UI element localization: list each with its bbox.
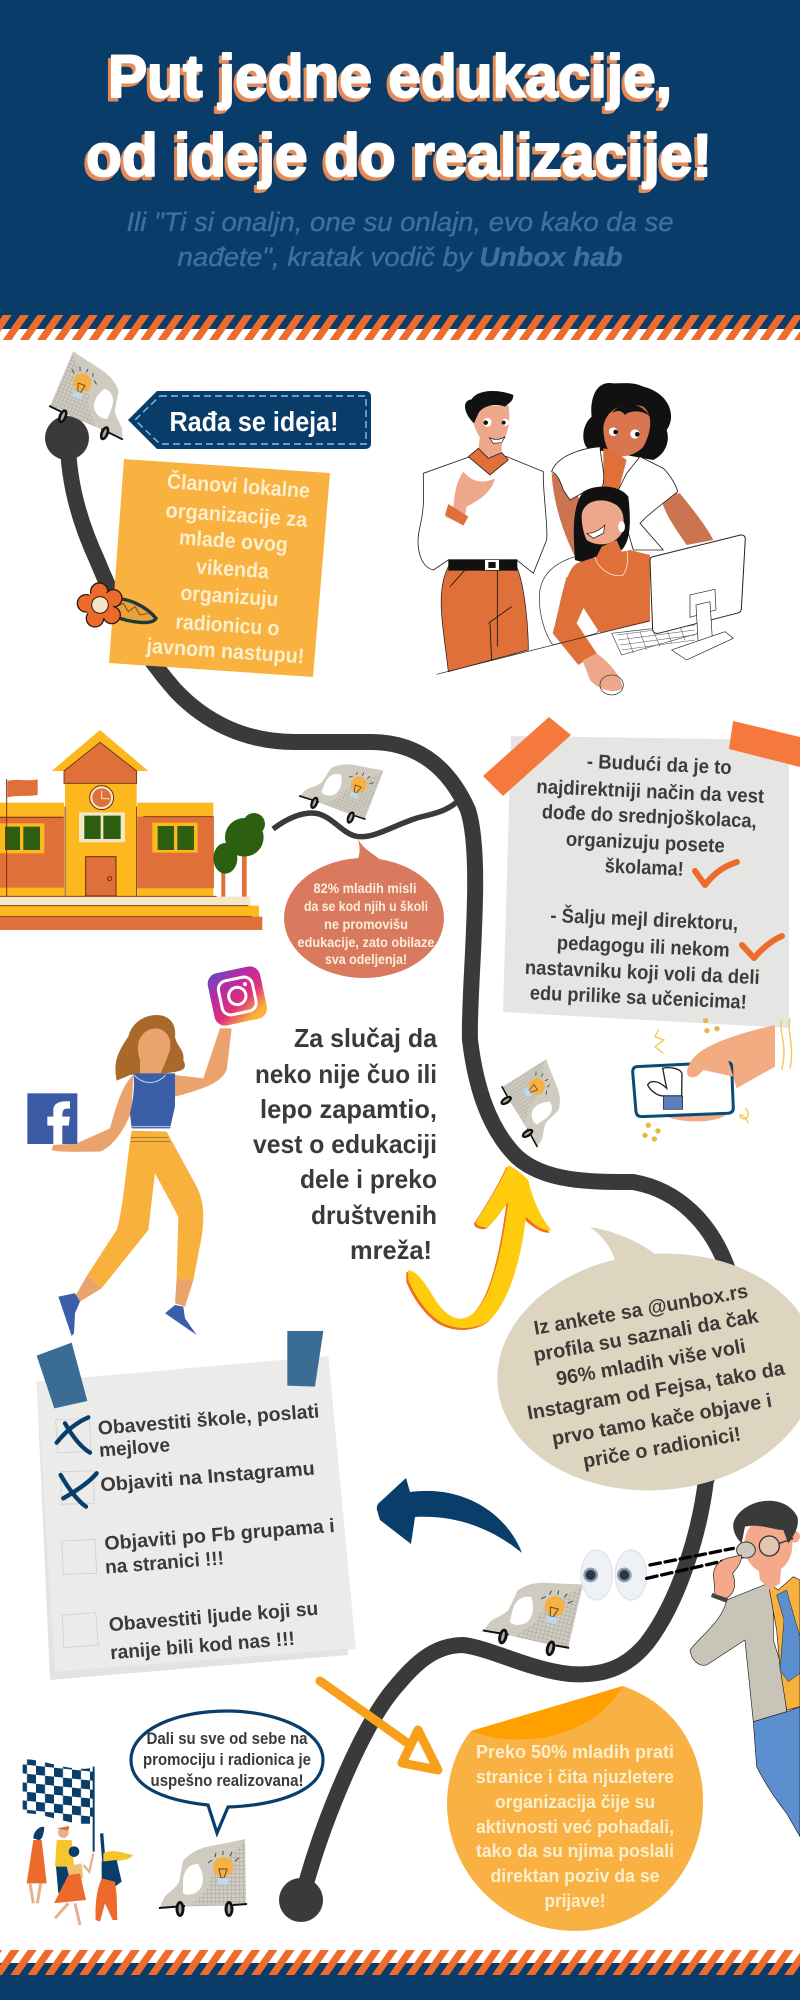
panel: checklist: Obavestiti škole, poslati [97, 1400, 320, 1440]
illustration: woman with social media icons [27, 964, 269, 1336]
arrow: orange diagonal [320, 1681, 438, 1770]
illustration: people with checkered flag [23, 1759, 133, 1925]
man [418, 391, 547, 672]
panel: school visits note: školama! [604, 855, 684, 881]
car on curve [493, 1058, 584, 1151]
panel: school visits note: - Budući da je to [586, 751, 732, 779]
panel: school visits note: edu prilike sa učenicima! [529, 982, 747, 1014]
woman at desk [539, 486, 650, 695]
tape left [483, 717, 571, 796]
panel: orange note: organizuju [180, 582, 279, 611]
text: social networks: društvenih [311, 1200, 437, 1230]
panel: orange note: mlade ovog [178, 526, 289, 557]
text: social networks: lepo zapamtio, [260, 1094, 437, 1124]
tape right [287, 1331, 323, 1387]
title [83, 43, 712, 192]
subtitle [126, 207, 674, 272]
speech bubble: survey: profila su saznali da čak [532, 1305, 761, 1367]
person three [54, 1846, 93, 1925]
panel: checklist: na stranici !!! [104, 1547, 225, 1579]
desk line [437, 621, 650, 674]
panel: checklist: Obavestiti ljude koji su [108, 1598, 319, 1636]
hand [713, 1555, 742, 1598]
speech bubble: survey: 96% mladih više voli [555, 1336, 747, 1391]
panel: school visits note: organizuju posete [565, 829, 725, 857]
road start point [45, 416, 89, 460]
panel: orange circle: Preko 50% mladih prati [476, 1741, 674, 1762]
text: social networks: Za slučaj da [294, 1023, 438, 1053]
icon: check one [695, 862, 737, 885]
speech bubble: 82%: ne promovišu [324, 916, 408, 932]
car at start [45, 350, 147, 447]
panel: school visits note: pedagogu ili nekom [556, 932, 730, 962]
title: od ideje do realizacije! [86, 122, 712, 189]
car on side road [296, 745, 385, 829]
panel: school visits note: - Šalju mejl direktoru, [550, 903, 739, 935]
speech bubble: final [131, 1711, 323, 1833]
illustration: man with magnifier [647, 1501, 800, 1837]
dotted gaze lines [647, 1548, 750, 1578]
computer [612, 535, 745, 660]
glasses [759, 1536, 779, 1556]
icon: flower hair clip [77, 583, 156, 627]
woman with curly hair [552, 383, 713, 557]
checkmarks [57, 1417, 97, 1507]
illustration: hand holding phone [633, 1018, 792, 1142]
panel: orange circle: prijave! [544, 1890, 606, 1911]
icon: check two [742, 936, 782, 958]
speech bubble: survey: Instagram od Fejsa, tako da [526, 1357, 787, 1425]
speech bubble: final: Dali su sve od sebe na [146, 1730, 308, 1748]
jacket [690, 1583, 787, 1722]
illustration: school building [0, 730, 265, 930]
speech bubble: final: uspešno realizovana! [150, 1772, 304, 1790]
subtitle: nađete", kratak vodič by Unbox hab [178, 242, 622, 272]
peeled corner [471, 1686, 623, 1739]
body [52, 1015, 232, 1336]
speech bubble: survey: prvo tamo kače objave i [550, 1390, 774, 1450]
checkboxes [56, 1418, 98, 1648]
panel: school visits note [483, 717, 800, 1028]
person four [96, 1833, 133, 1922]
car looking at eyes [481, 1563, 585, 1660]
text: social networks [253, 1023, 438, 1265]
road [68, 440, 737, 1900]
panel: orange note: organizacije za [165, 499, 308, 532]
arrow: yellow [406, 1165, 552, 1330]
icon: eyes [581, 1550, 647, 1600]
panel: orange note: javnom nastupu! [145, 635, 305, 668]
text: social networks: vest o edukaciji [253, 1129, 437, 1159]
footer band [0, 1950, 800, 2000]
shirt and tie [768, 1577, 800, 1710]
tape left [37, 1343, 87, 1408]
header band [0, 0, 800, 340]
speech bubble: 82%: sva odeljenja! [325, 951, 407, 967]
subtitle: Ili "Ti si onaljn, one su onlajn, evo kako da se [126, 207, 674, 237]
head [758, 1560, 782, 1590]
car at finish [159, 1839, 247, 1917]
tape right [729, 721, 800, 767]
tag: Rađa se ideja: Rađa se ideja! [170, 406, 338, 437]
speech bubble: survey [487, 1227, 800, 1503]
person two [55, 1826, 74, 1893]
panel: orange note [109, 459, 330, 677]
panel: orange note: vikenda [195, 556, 270, 583]
speech bubble: survey: Iz ankete sa @unbox.rs [532, 1280, 750, 1340]
text: social networks: neko nije čuo ili [255, 1059, 437, 1089]
panel: orange note: radionicu o [175, 611, 280, 641]
arrow: navy curved [377, 1478, 522, 1553]
panel: checklist: Objaviti po Fb grupama i [104, 1515, 336, 1555]
speech bubble: final: promociju i radionica je [143, 1751, 311, 1769]
panel: orange note: Članovi lokalne [166, 469, 311, 503]
panel: orange circle: aktivnosti već pohađali, [476, 1816, 674, 1837]
panel: checklist: ranije bili kod nas !!! [109, 1628, 296, 1664]
pants [753, 1707, 800, 1837]
panel: school visits note: dođe do srednjoškolaca, [541, 801, 757, 833]
panel: orange circle: direktan poziv da se [490, 1865, 660, 1886]
speech bubble: 82%: da se kod njih u školi [304, 898, 428, 914]
panel: orange circle [447, 1686, 703, 1931]
panel: school visits note: najdirektniji način da vest [536, 776, 765, 808]
title: Put jedne edukacije, [108, 43, 672, 110]
panel: orange circle: tako da su njima poslali [476, 1840, 674, 1861]
instagram icon [206, 964, 269, 1028]
panel: orange circle: organizacija čije su [495, 1791, 655, 1812]
panel: checklist: Objaviti na Instagramu [99, 1458, 316, 1496]
title: Put jedne edukacije, [105, 46, 669, 114]
panel: checklist [37, 1331, 356, 1680]
panel: checklist: mejlove [98, 1434, 171, 1462]
text: social networks: dele i preko [300, 1164, 437, 1194]
panel: orange circle: stranice i čita njuzletere [476, 1766, 674, 1787]
side road [273, 802, 457, 837]
panel: school visits note: nastavniku koji voli da deli [524, 957, 760, 989]
speech bubble: 82%: edukacije, zato obilaze [298, 934, 435, 950]
tag: Rađa se ideja [128, 391, 371, 449]
road end point [279, 1878, 323, 1922]
speech bubble: 82% [284, 839, 444, 978]
facebook icon [27, 1093, 77, 1144]
person one [27, 1827, 47, 1903]
illustration: three people at a computer [418, 383, 745, 695]
title: od ideje do realizacije! [83, 126, 709, 192]
text: social networks: mreža! [350, 1235, 432, 1265]
speech bubble: survey: priče o radionici! [581, 1423, 743, 1473]
speech bubble: 82%: 82% mladih misli [314, 880, 416, 896]
